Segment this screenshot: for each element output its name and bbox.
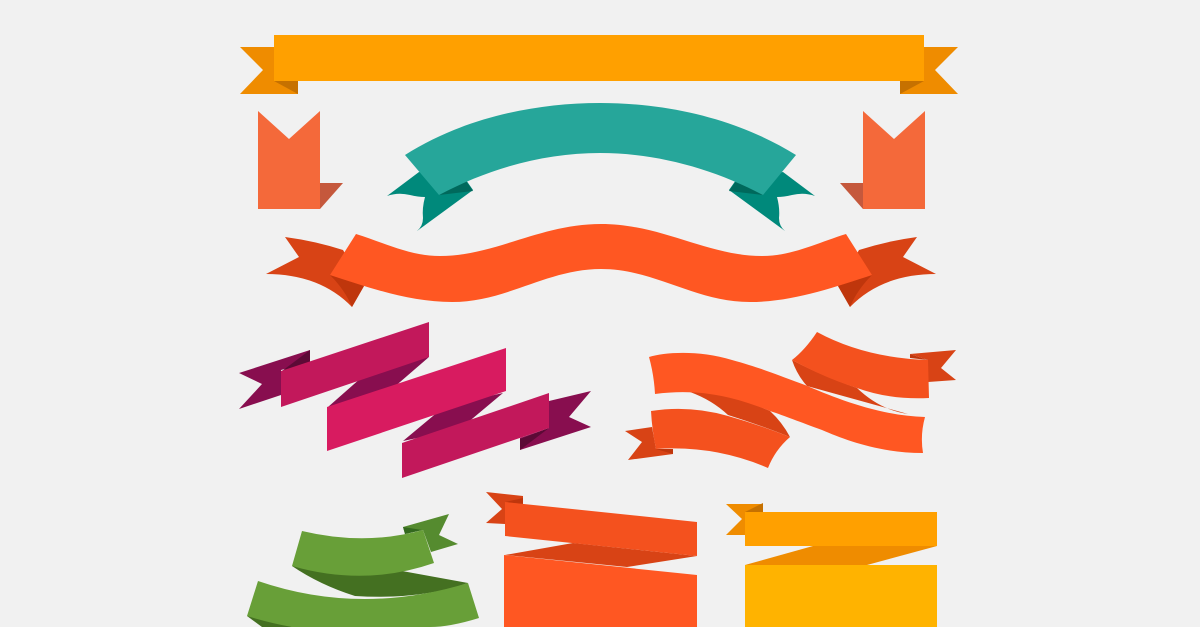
- green curved ribbon: [247, 514, 479, 627]
- top amber banner: [240, 35, 958, 94]
- right coral flag: [840, 111, 925, 209]
- orange folded banner: [486, 492, 697, 627]
- orange S-curve ribbon: [625, 332, 956, 468]
- magenta zigzag ribbon: [239, 322, 591, 478]
- yellow folded banner: [726, 503, 937, 627]
- teal arched ribbon: [387, 103, 815, 231]
- orange wave ribbon: [266, 224, 936, 307]
- left coral flag: [258, 111, 343, 209]
